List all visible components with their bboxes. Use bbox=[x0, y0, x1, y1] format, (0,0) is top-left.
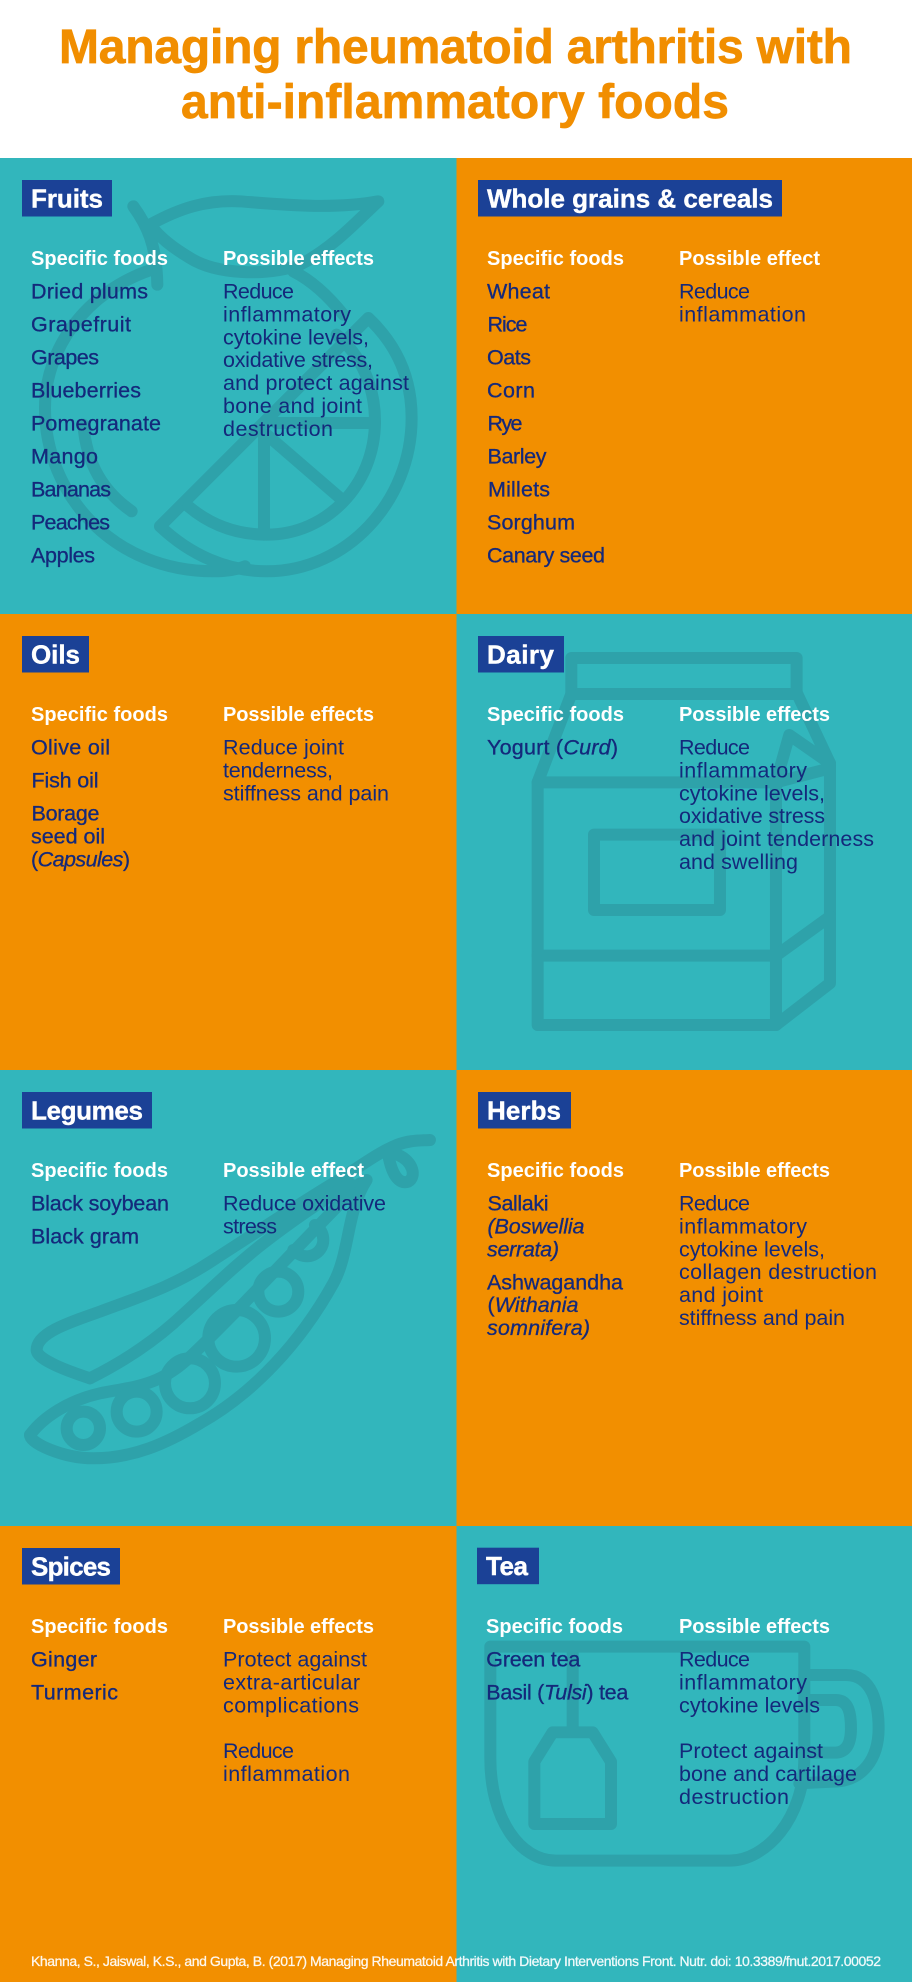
specific foods list: Specific foods bbox=[31, 1616, 168, 1638]
specific foods list bbox=[31, 1616, 168, 1704]
possible effects text: inflammatory bbox=[679, 1670, 807, 1694]
possible effects text: oxidative stress, bbox=[223, 348, 373, 372]
panel: spices bbox=[0, 1526, 456, 1982]
possible effects text: Reduce bbox=[679, 1192, 750, 1216]
possible effects text: Possible effects bbox=[679, 1160, 830, 1182]
possible effects text: Possible effects bbox=[223, 704, 374, 726]
possible effects text bbox=[679, 704, 874, 874]
heading: spices bbox=[22, 1548, 120, 1584]
heading: fruits: Fruits bbox=[31, 184, 103, 214]
possible effects text: inflammatory bbox=[679, 758, 807, 782]
specific foods list: Rice bbox=[488, 312, 528, 336]
heading: herbs: Herbs bbox=[487, 1096, 561, 1126]
possible effect text: inflammation bbox=[679, 302, 806, 326]
specific foods list: Yogurt (Curd) bbox=[487, 736, 618, 760]
possible effects text: complications bbox=[223, 1693, 359, 1717]
icon: tea cup with tea bag bbox=[490, 1647, 879, 1861]
icon: pea pod bbox=[30, 1140, 430, 1458]
specific foods list: Specific foods bbox=[31, 1160, 168, 1182]
specific foods list bbox=[31, 1160, 169, 1248]
panel: dairy bbox=[456, 614, 912, 1070]
panel: herbs bbox=[456, 1070, 912, 1526]
heading: tea: Tea bbox=[486, 1551, 529, 1581]
possible effect text: stress bbox=[223, 1214, 277, 1238]
possible effects text: cytokine levels, bbox=[679, 1237, 825, 1261]
icon: milk carton bbox=[538, 658, 830, 1025]
specific foods list: Apples bbox=[31, 544, 95, 568]
specific foods list: Specific foods bbox=[486, 1616, 623, 1638]
possible effect text: Possible effect bbox=[679, 248, 820, 270]
heading: tea bbox=[477, 1548, 539, 1584]
possible effects text: extra-articular bbox=[223, 1670, 360, 1694]
possible effects text: Reduce joint bbox=[223, 736, 344, 760]
specific foods list: Green tea bbox=[486, 1648, 580, 1672]
heading: oils: Oils bbox=[31, 640, 80, 670]
possible effects text: and protect against bbox=[223, 371, 409, 395]
possible effects text: and swelling bbox=[679, 850, 798, 874]
heading: legumes: Legumes bbox=[31, 1096, 143, 1126]
specific foods list: Specific foods bbox=[31, 248, 168, 270]
panel: oils bbox=[0, 614, 456, 1070]
possible effects text: Reduce bbox=[679, 1648, 750, 1672]
possible effects text: and joint tenderness bbox=[679, 827, 874, 851]
specific foods list: Specific foods bbox=[487, 1160, 624, 1182]
specific foods list: Turmeric bbox=[31, 1680, 118, 1704]
possible effects text: stiffness and pain bbox=[223, 781, 389, 805]
specific foods list: somnifera) bbox=[487, 1316, 590, 1340]
possible effects text: cytokine levels, bbox=[679, 781, 825, 805]
specific foods list: Ashwagandha bbox=[487, 1270, 623, 1294]
specific foods list: Sallaki bbox=[488, 1192, 548, 1216]
heading: dairy bbox=[478, 636, 564, 672]
specific foods list: Sorghum bbox=[487, 510, 575, 534]
specific foods list: Grapefruit bbox=[31, 312, 131, 336]
specific foods list bbox=[487, 248, 624, 568]
possible effects text: cytokine levels, bbox=[223, 325, 369, 349]
specific foods list: Ginger bbox=[31, 1648, 97, 1672]
heading: spices: Spices bbox=[31, 1552, 111, 1582]
panel: whole grains and cereals bbox=[456, 158, 912, 614]
heading: dairy: Dairy bbox=[487, 640, 555, 670]
specific foods list: Dried plums bbox=[31, 280, 148, 304]
specific foods list: Specific foods bbox=[31, 704, 168, 726]
panel: tea bbox=[456, 1526, 912, 1982]
possible effect text bbox=[223, 1160, 386, 1238]
specific foods list: Peaches bbox=[31, 510, 110, 534]
possible effects text bbox=[223, 704, 389, 805]
possible effects text: and joint bbox=[679, 1283, 763, 1307]
heading: herbs bbox=[478, 1092, 571, 1128]
possible effects text: Reduce bbox=[223, 280, 294, 304]
possible effects text: stiffness and pain bbox=[679, 1306, 845, 1330]
specific foods list: Specific foods bbox=[487, 248, 624, 270]
specific foods list: serrata) bbox=[487, 1237, 559, 1261]
specific foods list: Mango bbox=[31, 444, 98, 468]
possible effects text: Possible effects bbox=[223, 248, 374, 270]
icon: orange slice and leaf bbox=[45, 201, 412, 571]
specific foods list: Borage bbox=[32, 802, 100, 826]
heading: whole grains and cereals: Whole grains & cereals bbox=[487, 184, 773, 214]
title: anti-inflammatory foods bbox=[181, 76, 729, 129]
possible effects text: tenderness, bbox=[223, 758, 333, 782]
specific foods list bbox=[486, 1616, 628, 1704]
title bbox=[59, 21, 852, 129]
possible effects text: destruction bbox=[679, 1785, 789, 1809]
possible effects text: Reduce bbox=[223, 1739, 294, 1763]
specific foods list bbox=[31, 248, 168, 568]
specific foods list: Fish oil bbox=[32, 768, 98, 792]
possible effects text: Reduce bbox=[679, 736, 750, 760]
possible effects text: Possible effects bbox=[223, 1616, 374, 1638]
specific foods list: Bananas bbox=[31, 478, 111, 502]
possible effect text: Reduce oxidative bbox=[223, 1192, 386, 1216]
possible effects text bbox=[679, 1160, 877, 1330]
possible effects text: collagen destruction bbox=[679, 1260, 877, 1284]
possible effect text bbox=[679, 248, 820, 326]
specific foods list: Olive oil bbox=[31, 736, 110, 760]
possible effects text: oxidative stress bbox=[679, 804, 825, 828]
possible effect text: Possible effect bbox=[223, 1160, 364, 1182]
specific foods list: (Capsules) bbox=[31, 847, 130, 871]
specific foods list: Blueberries bbox=[31, 378, 141, 402]
specific foods list: Black gram bbox=[31, 1224, 139, 1248]
panel: fruits bbox=[0, 158, 456, 614]
possible effects text: Possible effects bbox=[679, 704, 830, 726]
specific foods list bbox=[31, 704, 168, 871]
possible effects text: cytokine levels bbox=[679, 1693, 820, 1717]
heading: oils bbox=[22, 636, 89, 672]
possible effects text bbox=[679, 1616, 857, 1809]
specific foods list: Black soybean bbox=[31, 1192, 169, 1216]
possible effects text: bone and joint bbox=[223, 394, 362, 418]
heading: fruits bbox=[22, 180, 112, 216]
possible effects text bbox=[223, 248, 409, 441]
specific foods list bbox=[487, 704, 624, 760]
specific foods list: Corn bbox=[487, 378, 535, 402]
title: Managing rheumatoid arthritis with bbox=[59, 21, 852, 74]
specific foods list: Wheat bbox=[487, 280, 550, 304]
specific foods list: Canary seed bbox=[487, 544, 605, 568]
possible effects text: inflammation bbox=[223, 1762, 350, 1786]
citation: Khanna, S., Jaiswal, K.S., and Gupta, B. (2017) Managing Rheumatoid Arthritis with Dietary Interventions Front. Nutr. doi: 10.3389/fnut.2017.00052 bbox=[31, 1953, 881, 1969]
possible effects text bbox=[223, 1616, 374, 1786]
specific foods list: Basil (Tulsi) tea bbox=[486, 1680, 628, 1704]
specific foods list: Pomegranate bbox=[31, 412, 161, 436]
possible effects text: Protect against bbox=[223, 1648, 367, 1672]
possible effects text: bone and cartilage bbox=[679, 1762, 857, 1786]
specific foods list bbox=[487, 1160, 624, 1340]
possible effects text: destruction bbox=[223, 417, 333, 441]
possible effects text: inflammatory bbox=[679, 1214, 807, 1238]
specific foods list: Specific foods bbox=[487, 704, 624, 726]
specific foods list: (Boswellia bbox=[488, 1214, 585, 1238]
possible effects text: Protect against bbox=[679, 1739, 823, 1763]
specific foods list: Millets bbox=[488, 478, 550, 502]
possible effect text: Reduce bbox=[679, 280, 750, 304]
panel: legumes bbox=[0, 1070, 456, 1526]
specific foods list: (Withania bbox=[488, 1293, 579, 1317]
specific foods list: Oats bbox=[487, 346, 531, 370]
specific foods list: Barley bbox=[488, 444, 547, 468]
specific foods list: Grapes bbox=[31, 346, 99, 370]
specific foods list: seed oil bbox=[31, 824, 105, 848]
possible effects text: inflammatory bbox=[223, 302, 351, 326]
specific foods list: Rye bbox=[488, 412, 522, 436]
possible effects text: Possible effects bbox=[679, 1616, 830, 1638]
